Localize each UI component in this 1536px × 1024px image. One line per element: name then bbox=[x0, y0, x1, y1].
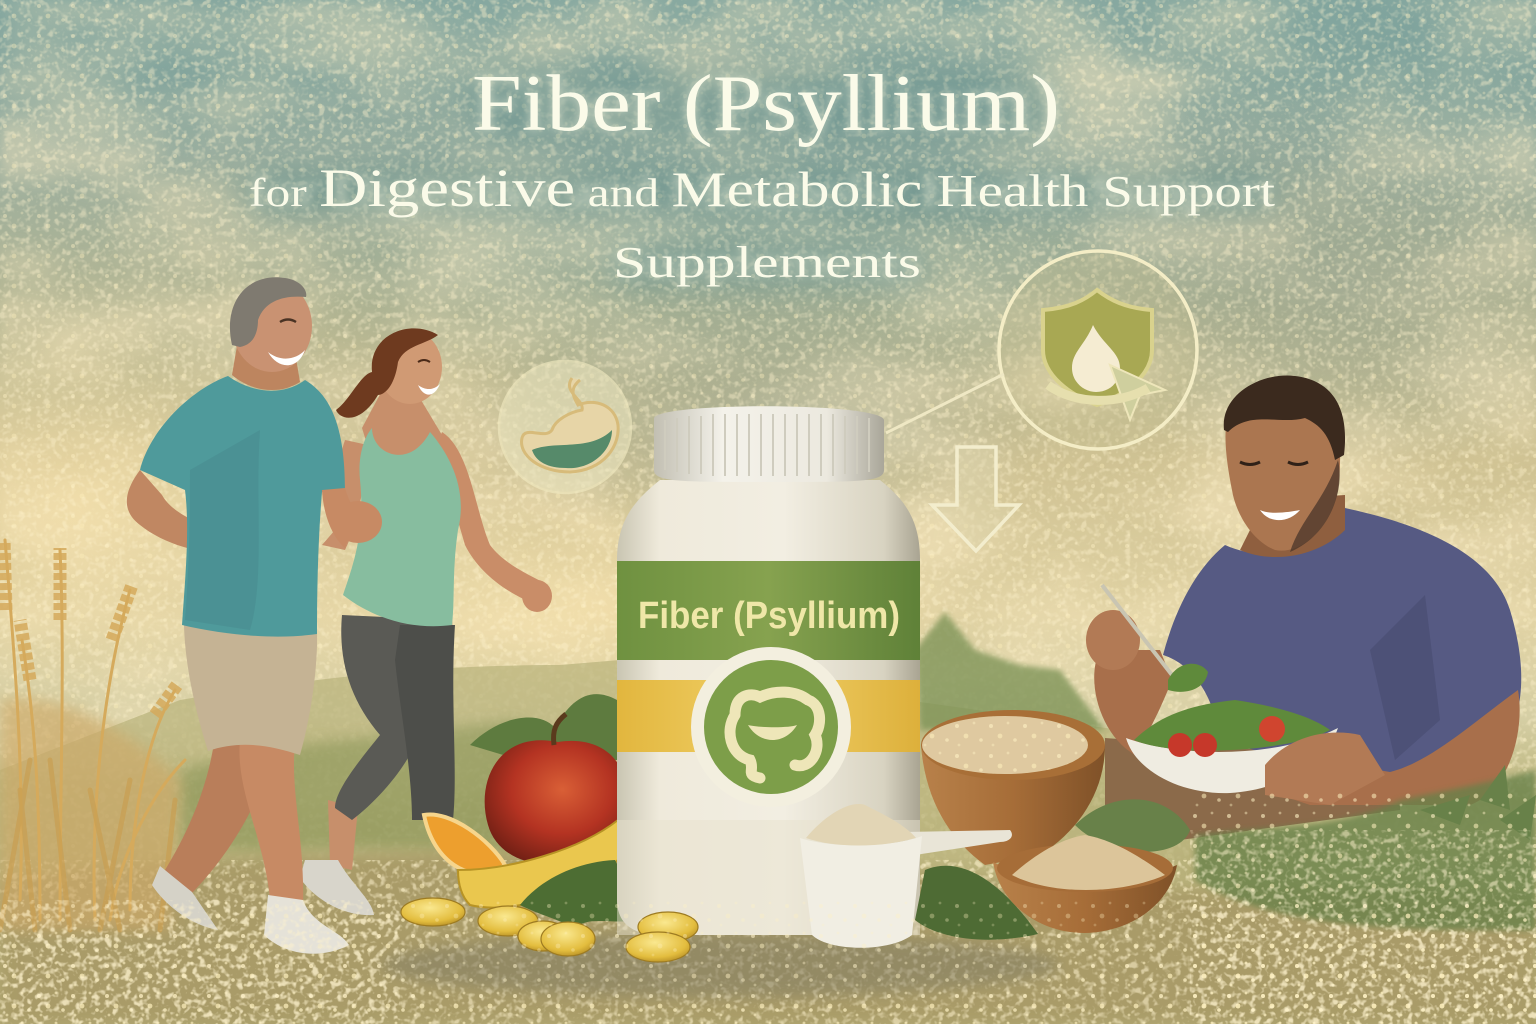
hair bbox=[336, 328, 438, 418]
bottle label text: Fiber (Psyllium) bbox=[638, 595, 900, 637]
foreground speckle overlay bbox=[0, 790, 1536, 1024]
head bbox=[232, 280, 312, 372]
bottle body bbox=[617, 480, 920, 935]
title light halo bbox=[249, 60, 1275, 287]
wheat grass bbox=[0, 540, 185, 930]
foreground foliage bbox=[1075, 765, 1536, 930]
neck bbox=[1240, 495, 1345, 557]
shoes bbox=[300, 860, 374, 915]
head bbox=[1225, 390, 1340, 551]
near arm bbox=[322, 488, 360, 548]
table bbox=[1105, 738, 1400, 840]
subtitle second line: Supplements bbox=[613, 238, 921, 287]
hair bbox=[1224, 376, 1345, 460]
title glow bbox=[250, 70, 1275, 285]
hand bbox=[522, 580, 552, 612]
closed eyes bbox=[1240, 462, 1308, 464]
food: apple, orange and banana bbox=[424, 694, 645, 928]
head bbox=[378, 330, 442, 404]
smile bbox=[1260, 510, 1300, 520]
hair bbox=[230, 277, 306, 347]
skin ankle bbox=[328, 800, 358, 870]
arm bbox=[322, 440, 368, 550]
icon: shield with drop circle bbox=[886, 251, 1197, 449]
near hand bbox=[1265, 733, 1385, 805]
person: jogging man bbox=[127, 277, 382, 954]
supplement bottle bbox=[617, 406, 920, 935]
scoop of powder bbox=[800, 804, 1038, 948]
title light halo: for Digestive and Metabolic Health Support bbox=[249, 165, 1275, 216]
icon: stomach circle bbox=[499, 361, 631, 493]
badge: intestine bbox=[691, 647, 851, 807]
title light halo: Supplements bbox=[613, 238, 921, 287]
connector line bbox=[886, 374, 1004, 433]
legs bbox=[165, 735, 270, 895]
back arm bbox=[435, 432, 548, 606]
fork bbox=[1102, 585, 1172, 675]
distant hills and ground bbox=[0, 612, 1536, 1024]
tank top bbox=[343, 428, 461, 626]
yellow label band bbox=[617, 680, 920, 752]
t-shirt bbox=[1163, 508, 1521, 790]
cap bbox=[654, 406, 884, 482]
t-shirt bbox=[140, 376, 345, 637]
legs bbox=[335, 615, 452, 820]
far arm bbox=[127, 470, 225, 553]
green label band bbox=[617, 561, 920, 660]
title light halo: Fiber (Psyllium) bbox=[472, 60, 1060, 148]
subtitle: for Digestive and Metabolic Health Support bbox=[249, 158, 1275, 218]
neck bbox=[232, 340, 300, 390]
title: Fiber (Psyllium) bbox=[472, 60, 1060, 148]
salad bowl bbox=[1126, 728, 1338, 793]
bowl of powder bbox=[993, 835, 1177, 933]
person: man eating salad bbox=[1086, 376, 1521, 840]
person: jogging woman bbox=[300, 328, 552, 915]
neck and chest bbox=[362, 385, 442, 475]
softgel capsules bbox=[401, 898, 698, 962]
shorts bbox=[184, 625, 317, 755]
near arm bbox=[1265, 690, 1520, 805]
title bbox=[249, 60, 1275, 287]
shoes bbox=[152, 866, 218, 930]
far arm and hand bbox=[1094, 650, 1172, 755]
icon: down arrow bbox=[932, 447, 1019, 551]
bowl of grains bbox=[921, 710, 1105, 865]
